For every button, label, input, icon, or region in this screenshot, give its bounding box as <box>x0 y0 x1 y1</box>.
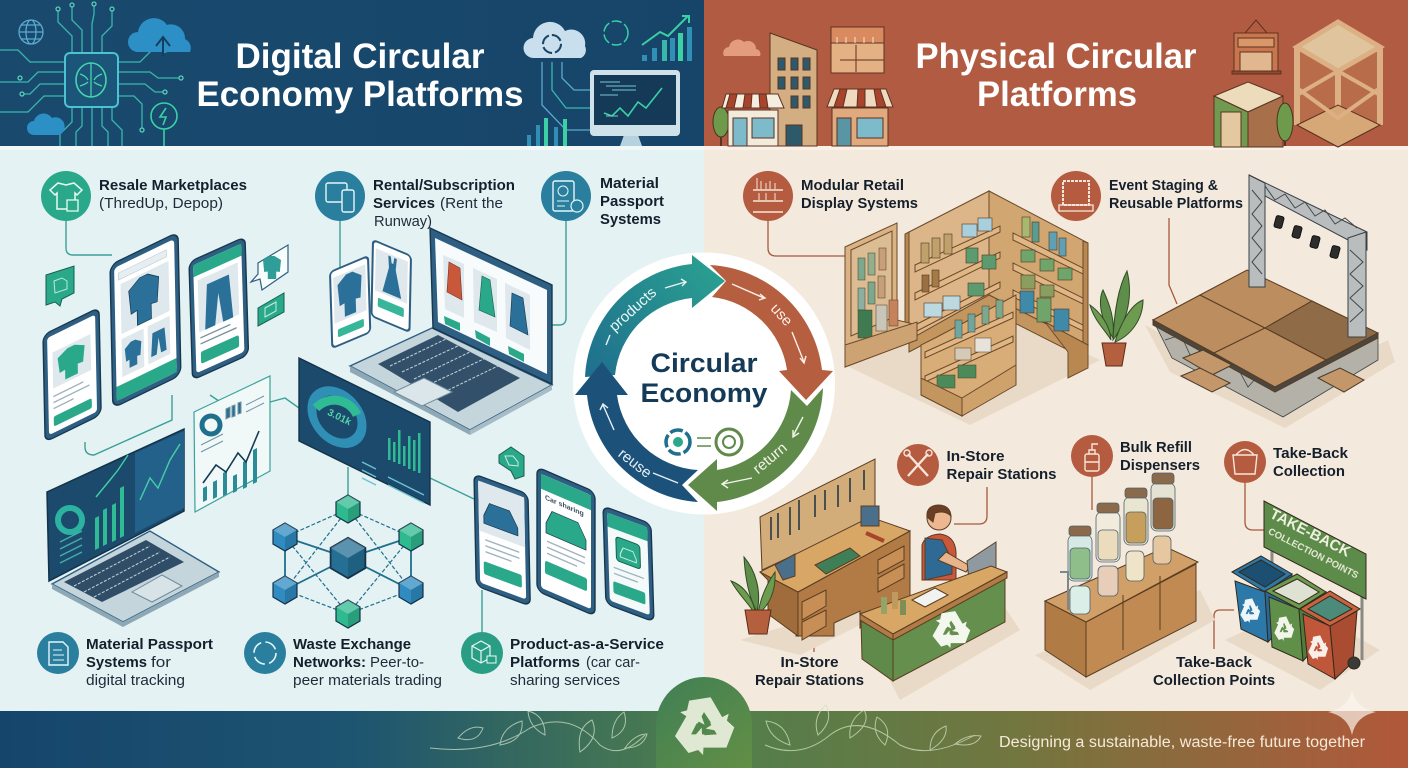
chart: dashboard donut: 3.01k <box>325 407 353 428</box>
icon: green tag <box>258 293 284 326</box>
illustration: event stage <box>1145 175 1395 428</box>
chart: dashboard bars <box>388 430 420 473</box>
label: product as a service: Product-as-a-Service <box>510 637 664 653</box>
phone: car icon <box>603 506 654 622</box>
label: resale marketplaces <box>41 171 247 221</box>
icon: wooden frame cube <box>1297 22 1380 147</box>
icon: recycle badge <box>656 677 752 768</box>
bin: blue <box>1232 556 1292 642</box>
label: product as a service: Platforms <box>510 655 580 671</box>
tablet: dress <box>371 240 411 332</box>
stage understructure <box>1153 320 1378 417</box>
label: event staging: Reusable Platforms <box>1109 196 1243 212</box>
label: take-back collection: Collection <box>1273 464 1345 480</box>
bin: green <box>1265 574 1326 661</box>
icon: tree <box>713 107 729 146</box>
label: material passport tracking: Systems <box>86 655 147 671</box>
icon: garment bubble <box>251 245 288 290</box>
arrow: return <box>688 388 823 511</box>
arrow: use: use <box>767 300 796 330</box>
label: in-store repair bottom: In-Store <box>780 655 838 671</box>
label: in-store repair top <box>897 444 1056 486</box>
sign: take-back collection points: TAKE-BACK <box>1267 505 1353 561</box>
sign: take-back collection points: COLLECTION POINTS <box>1266 526 1360 581</box>
illustration: blockchain waste network <box>273 495 423 628</box>
stage lights <box>1274 215 1340 259</box>
arrow: products <box>585 255 725 377</box>
shelves: left wall <box>915 218 1000 332</box>
background: physical side <box>704 146 1408 712</box>
icon: shop lower <box>827 89 893 146</box>
chart: dashboard donut <box>312 385 362 450</box>
label: material passport top: Passport <box>600 194 664 210</box>
repair worker <box>922 505 970 580</box>
center title: Circular <box>650 348 758 378</box>
sparkle <box>1328 690 1376 735</box>
icon: green chat bubble <box>46 266 74 306</box>
footer band <box>0 690 1408 768</box>
icon: loop symbols <box>666 429 742 455</box>
icon: tree right <box>1277 103 1293 146</box>
label: in-store repair top: In-Store <box>946 449 1004 465</box>
icon: globe <box>19 20 43 44</box>
bin: orange <box>1300 591 1360 679</box>
icon: passport <box>541 171 591 221</box>
icon: box and car <box>461 632 503 674</box>
front gondola <box>921 295 1016 416</box>
icon: potted plant <box>1090 271 1143 366</box>
label: product as a service: (car car- <box>586 655 640 671</box>
illustration: dashboard panel <box>299 358 430 505</box>
circuit lines to monitor <box>542 62 590 130</box>
icon: shop with awning <box>722 94 784 146</box>
arrow: return: return <box>750 439 791 478</box>
label: rental subscription <box>315 171 515 230</box>
icon: shelving <box>743 171 793 221</box>
workbench <box>760 506 910 640</box>
arrow: use <box>710 265 833 400</box>
leaf vines <box>430 705 981 752</box>
arrow: products: products <box>606 284 660 335</box>
title: physical: Platforms <box>977 75 1137 114</box>
title: physical <box>916 37 1197 114</box>
phone: pants listing <box>189 237 249 380</box>
label: waste exchange: Peer-to- <box>370 655 424 671</box>
illustration: resale phones <box>43 232 288 442</box>
label: material passport top <box>541 171 664 228</box>
sign: take-back collection points <box>1264 501 1366 599</box>
chart: laptop donut <box>58 508 82 532</box>
label: waste exchange <box>244 632 442 689</box>
label: take-back collection: Take-Back <box>1273 446 1349 462</box>
label: resale marketplaces: Resale Marketplaces <box>99 178 247 194</box>
background: digital side <box>0 146 704 712</box>
label: take-back points <box>1153 655 1275 689</box>
laptop: rental storefront <box>350 228 552 435</box>
title: digital: Economy Platforms <box>196 75 524 114</box>
phone: car sharing: Car sharing <box>545 493 584 518</box>
phone: car sharing <box>537 467 595 616</box>
label: bulk refill <box>1071 435 1200 477</box>
icon: tools <box>897 444 939 486</box>
shelves: right wall <box>1013 217 1083 331</box>
label: rental subscription: Runway) <box>374 214 432 230</box>
center title: Economy <box>640 378 768 408</box>
label: rental subscription: Services <box>373 196 435 212</box>
truss <box>1249 175 1367 337</box>
counter <box>860 566 1007 681</box>
icon: small plant <box>731 557 775 634</box>
illustration: take-back bins <box>1225 501 1380 690</box>
phone: car listing <box>474 474 530 606</box>
icon: devices <box>315 171 365 221</box>
walls: corner unit <box>905 191 1088 378</box>
connector lines: digital <box>66 221 566 632</box>
icon: dashed ring <box>604 21 628 45</box>
label: in-store repair top: Repair Stations <box>946 467 1056 483</box>
label: bulk refill: Dispensers <box>1120 458 1200 474</box>
icon: tall building <box>770 33 817 146</box>
label: resale marketplaces: (ThredUp, Depop) <box>99 196 223 212</box>
label: waste exchange: Waste Exchange <box>293 637 411 653</box>
icon: stage frame <box>1051 171 1101 221</box>
icon: lightning <box>151 103 177 146</box>
icon: cloud <box>723 40 760 56</box>
header: physical <box>704 0 1408 147</box>
label: material passport tracking <box>37 632 213 689</box>
icon: rising bars with arrow <box>642 16 692 61</box>
title: physical: Physical Circular <box>916 37 1197 76</box>
title: digital: Digital Circular <box>236 37 485 76</box>
stage deck <box>1153 270 1378 392</box>
label: material passport top: Material <box>600 176 659 192</box>
label: take-back points: Take-Back <box>1176 655 1253 671</box>
icon: monitor with trend <box>590 70 680 146</box>
label: take-back collection <box>1224 441 1349 483</box>
icon: bucket <box>1224 441 1266 483</box>
phone: small shirt <box>43 308 101 442</box>
label: in-store repair bottom <box>755 655 864 689</box>
label: material passport tracking: for <box>151 655 171 671</box>
label: waste exchange: Networks: <box>293 655 366 671</box>
phone: jacket listing <box>110 232 181 408</box>
arrow: reuse <box>575 362 698 502</box>
label: material passport tracking: Material Passport <box>86 637 213 653</box>
label: material passport top: Systems <box>600 212 661 228</box>
label: take-back points: Collection Points <box>1153 673 1275 689</box>
label: bulk refill: Bulk Refill <box>1120 440 1192 456</box>
icon: hanging sign store <box>1232 20 1281 74</box>
icon: document <box>37 632 79 674</box>
label: product as a service <box>461 632 664 689</box>
label: rental subscription: Rental/Subscription <box>373 178 515 194</box>
illustration: rental devices <box>330 228 552 435</box>
center title <box>640 348 768 408</box>
icon: car chat bubble <box>499 447 524 479</box>
illustration: refill dispensers <box>1035 473 1215 690</box>
label: rental subscription: (Rent the <box>440 196 503 212</box>
illustration: analytics laptop <box>47 429 219 627</box>
diagram: circular economy loop <box>573 252 835 514</box>
footer tagline: Designing a sustainable, waste-free future together <box>999 734 1365 751</box>
refill jars <box>1060 473 1175 614</box>
label: modular retail: Modular Retail <box>801 178 904 194</box>
icon: cloud upload <box>128 18 191 56</box>
label: event staging: Event Staging & <box>1109 178 1219 194</box>
arrow: reuse: reuse <box>615 445 655 482</box>
illustration: car sharing phones <box>474 447 654 622</box>
label: event staging <box>1051 171 1243 221</box>
icon: t-shirt <box>41 171 91 221</box>
illustration: modular retail display <box>845 191 1100 425</box>
icon: bottom bars <box>527 118 567 146</box>
monitor <box>967 542 996 587</box>
label: waste exchange: peer materials trading <box>293 673 442 689</box>
title: digital <box>196 37 524 114</box>
pegboard with tools <box>760 459 875 570</box>
label: product as a service: sharing services <box>510 673 620 689</box>
connector lines: physical <box>768 218 1264 652</box>
icon: cycle arrows <box>244 632 286 674</box>
icon: shop upper <box>831 27 884 73</box>
header: digital <box>0 0 704 146</box>
illustration: analytics card <box>194 376 270 512</box>
icon: pump bottle <box>1071 435 1113 477</box>
icon: kiosk <box>1214 82 1283 147</box>
label: modular retail: Display Systems <box>801 196 918 212</box>
icon: circuit chip with brain <box>0 2 183 146</box>
post <box>1272 540 1362 660</box>
steps <box>1181 350 1364 392</box>
label: in-store repair bottom: Repair Stations <box>755 673 864 689</box>
icon: small cloud <box>27 114 65 135</box>
peg panel <box>845 223 917 367</box>
icon: sync cloud <box>523 22 586 58</box>
illustration: repair station <box>740 459 1020 700</box>
tablet: coat <box>330 256 370 348</box>
label: modular retail <box>743 171 918 221</box>
label: material passport tracking: digital tracking <box>86 673 185 689</box>
